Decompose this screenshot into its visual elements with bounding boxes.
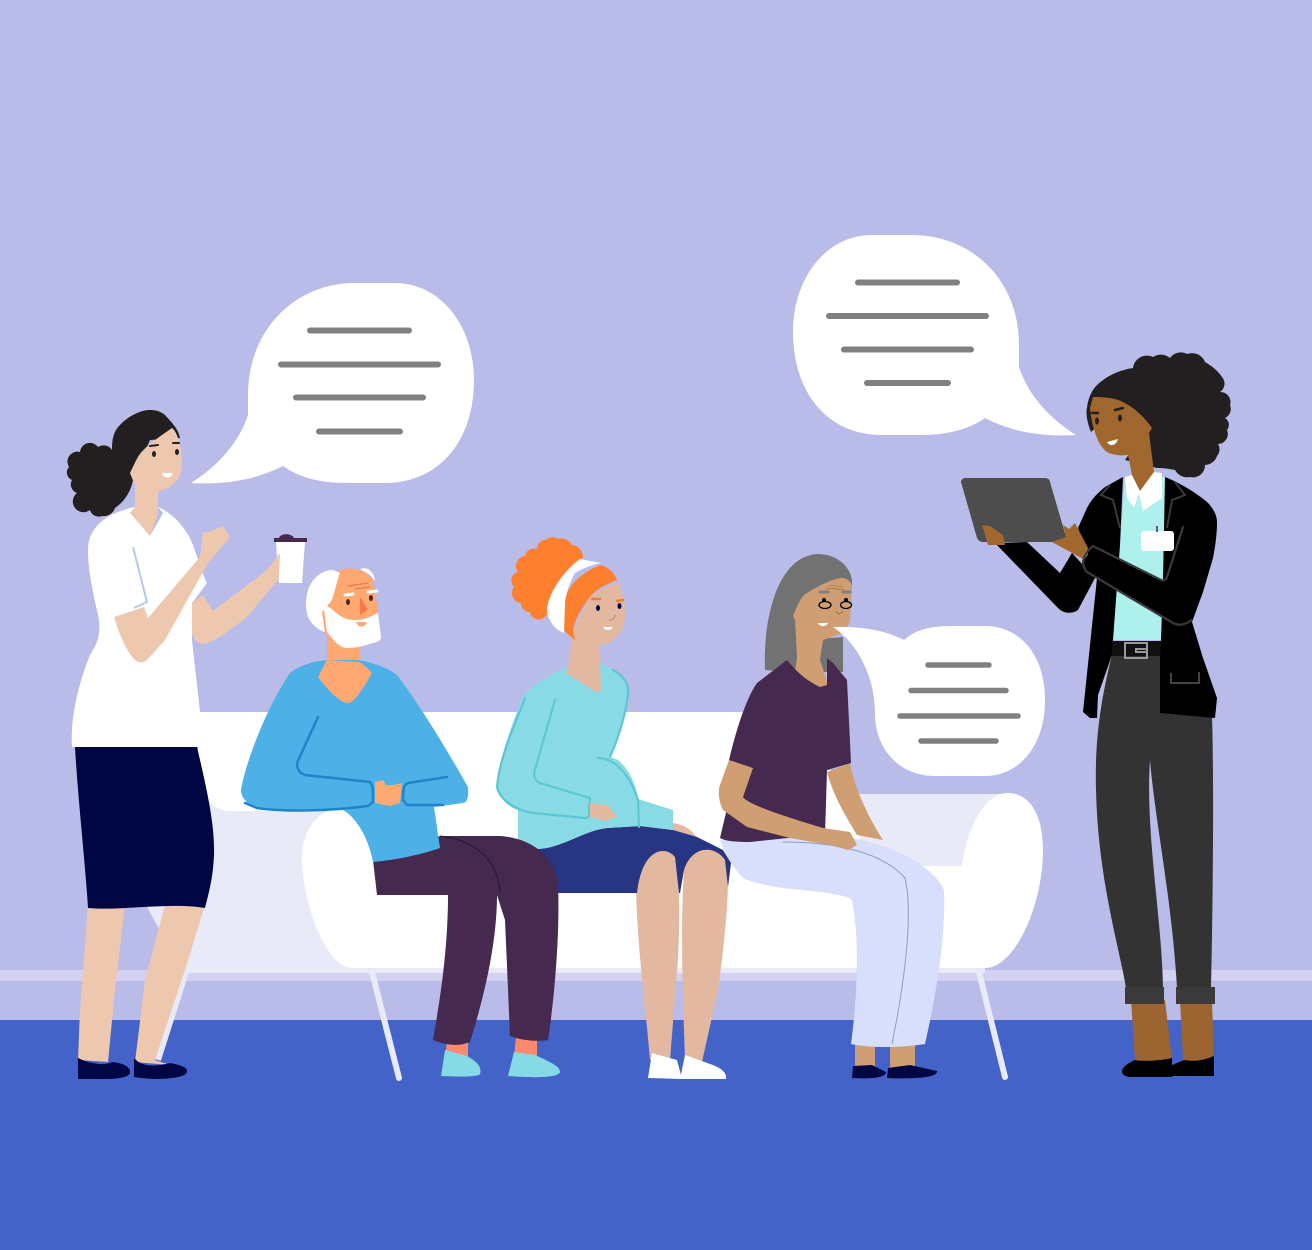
shoes — [441, 1050, 560, 1077]
sweater — [497, 663, 673, 849]
face details — [345, 583, 377, 626]
hair — [67, 410, 180, 517]
neck and face — [566, 583, 625, 693]
shoes — [648, 1053, 726, 1079]
blouse — [1113, 477, 1165, 640]
curly hair — [1086, 352, 1231, 477]
trousers — [720, 835, 944, 1047]
speech bubble: centre right — [833, 626, 1045, 776]
trousers — [1096, 655, 1213, 988]
left arm — [995, 542, 1095, 613]
neckline — [318, 660, 372, 703]
boots — [1131, 1000, 1214, 1066]
purple top — [720, 658, 851, 842]
sleeve seam — [133, 547, 147, 608]
skirt — [75, 747, 214, 909]
person: seated older man in blue — [241, 568, 560, 1077]
beard — [323, 603, 381, 648]
near arm — [719, 760, 857, 850]
sweater — [241, 660, 468, 862]
coffee cup — [268, 534, 307, 583]
person: standing woman with coffee — [67, 410, 307, 1079]
far arm — [192, 553, 280, 644]
sweater seams — [497, 670, 639, 827]
near arm — [114, 526, 230, 662]
skirt — [537, 826, 731, 893]
feet — [855, 1045, 915, 1068]
shoes — [78, 1058, 130, 1079]
face details — [818, 586, 852, 626]
face details — [1092, 408, 1123, 445]
knee hand — [673, 823, 697, 838]
head and neck — [792, 578, 852, 690]
face — [317, 569, 378, 640]
belt — [1112, 641, 1162, 658]
hand — [590, 803, 617, 821]
sofa — [147, 712, 1043, 1078]
legs — [373, 836, 558, 1045]
lapels — [1101, 482, 1185, 528]
legs — [636, 851, 679, 1060]
hands — [375, 780, 402, 806]
neck — [327, 625, 360, 680]
blazer — [1078, 477, 1123, 718]
speech bubble: right — [793, 235, 1076, 435]
headband — [547, 559, 601, 633]
near forearm — [1083, 546, 1192, 625]
far arm — [827, 763, 883, 840]
pocket — [1171, 672, 1199, 683]
hands — [982, 523, 1088, 560]
badge — [1141, 526, 1174, 551]
speech bubble: left — [191, 283, 474, 483]
hair bun — [511, 537, 583, 619]
person: pregnant woman with orange hair — [497, 537, 731, 1079]
white top — [72, 507, 207, 747]
sweater seams — [245, 717, 447, 810]
hair — [306, 568, 375, 632]
person: standing woman with tablet — [961, 352, 1231, 1077]
face and neck — [1090, 397, 1154, 491]
face details — [592, 599, 623, 630]
wall patch behind far arm of seated woman — [850, 740, 870, 794]
neck — [130, 478, 158, 536]
cuffs — [1125, 987, 1215, 1004]
shoes — [852, 1065, 937, 1078]
face — [130, 428, 182, 493]
face details — [150, 443, 179, 478]
legs — [78, 905, 125, 1062]
grey hair — [765, 554, 852, 672]
ankles — [445, 1038, 537, 1058]
orange hair — [563, 565, 617, 640]
neck over collar — [1132, 472, 1154, 491]
tablet — [961, 478, 1066, 542]
wall skirting — [0, 970, 1312, 981]
person: seated older woman with grey hair — [719, 554, 944, 1078]
shoes — [1122, 1056, 1214, 1077]
collar — [1125, 472, 1162, 511]
floor — [0, 1020, 1312, 1250]
